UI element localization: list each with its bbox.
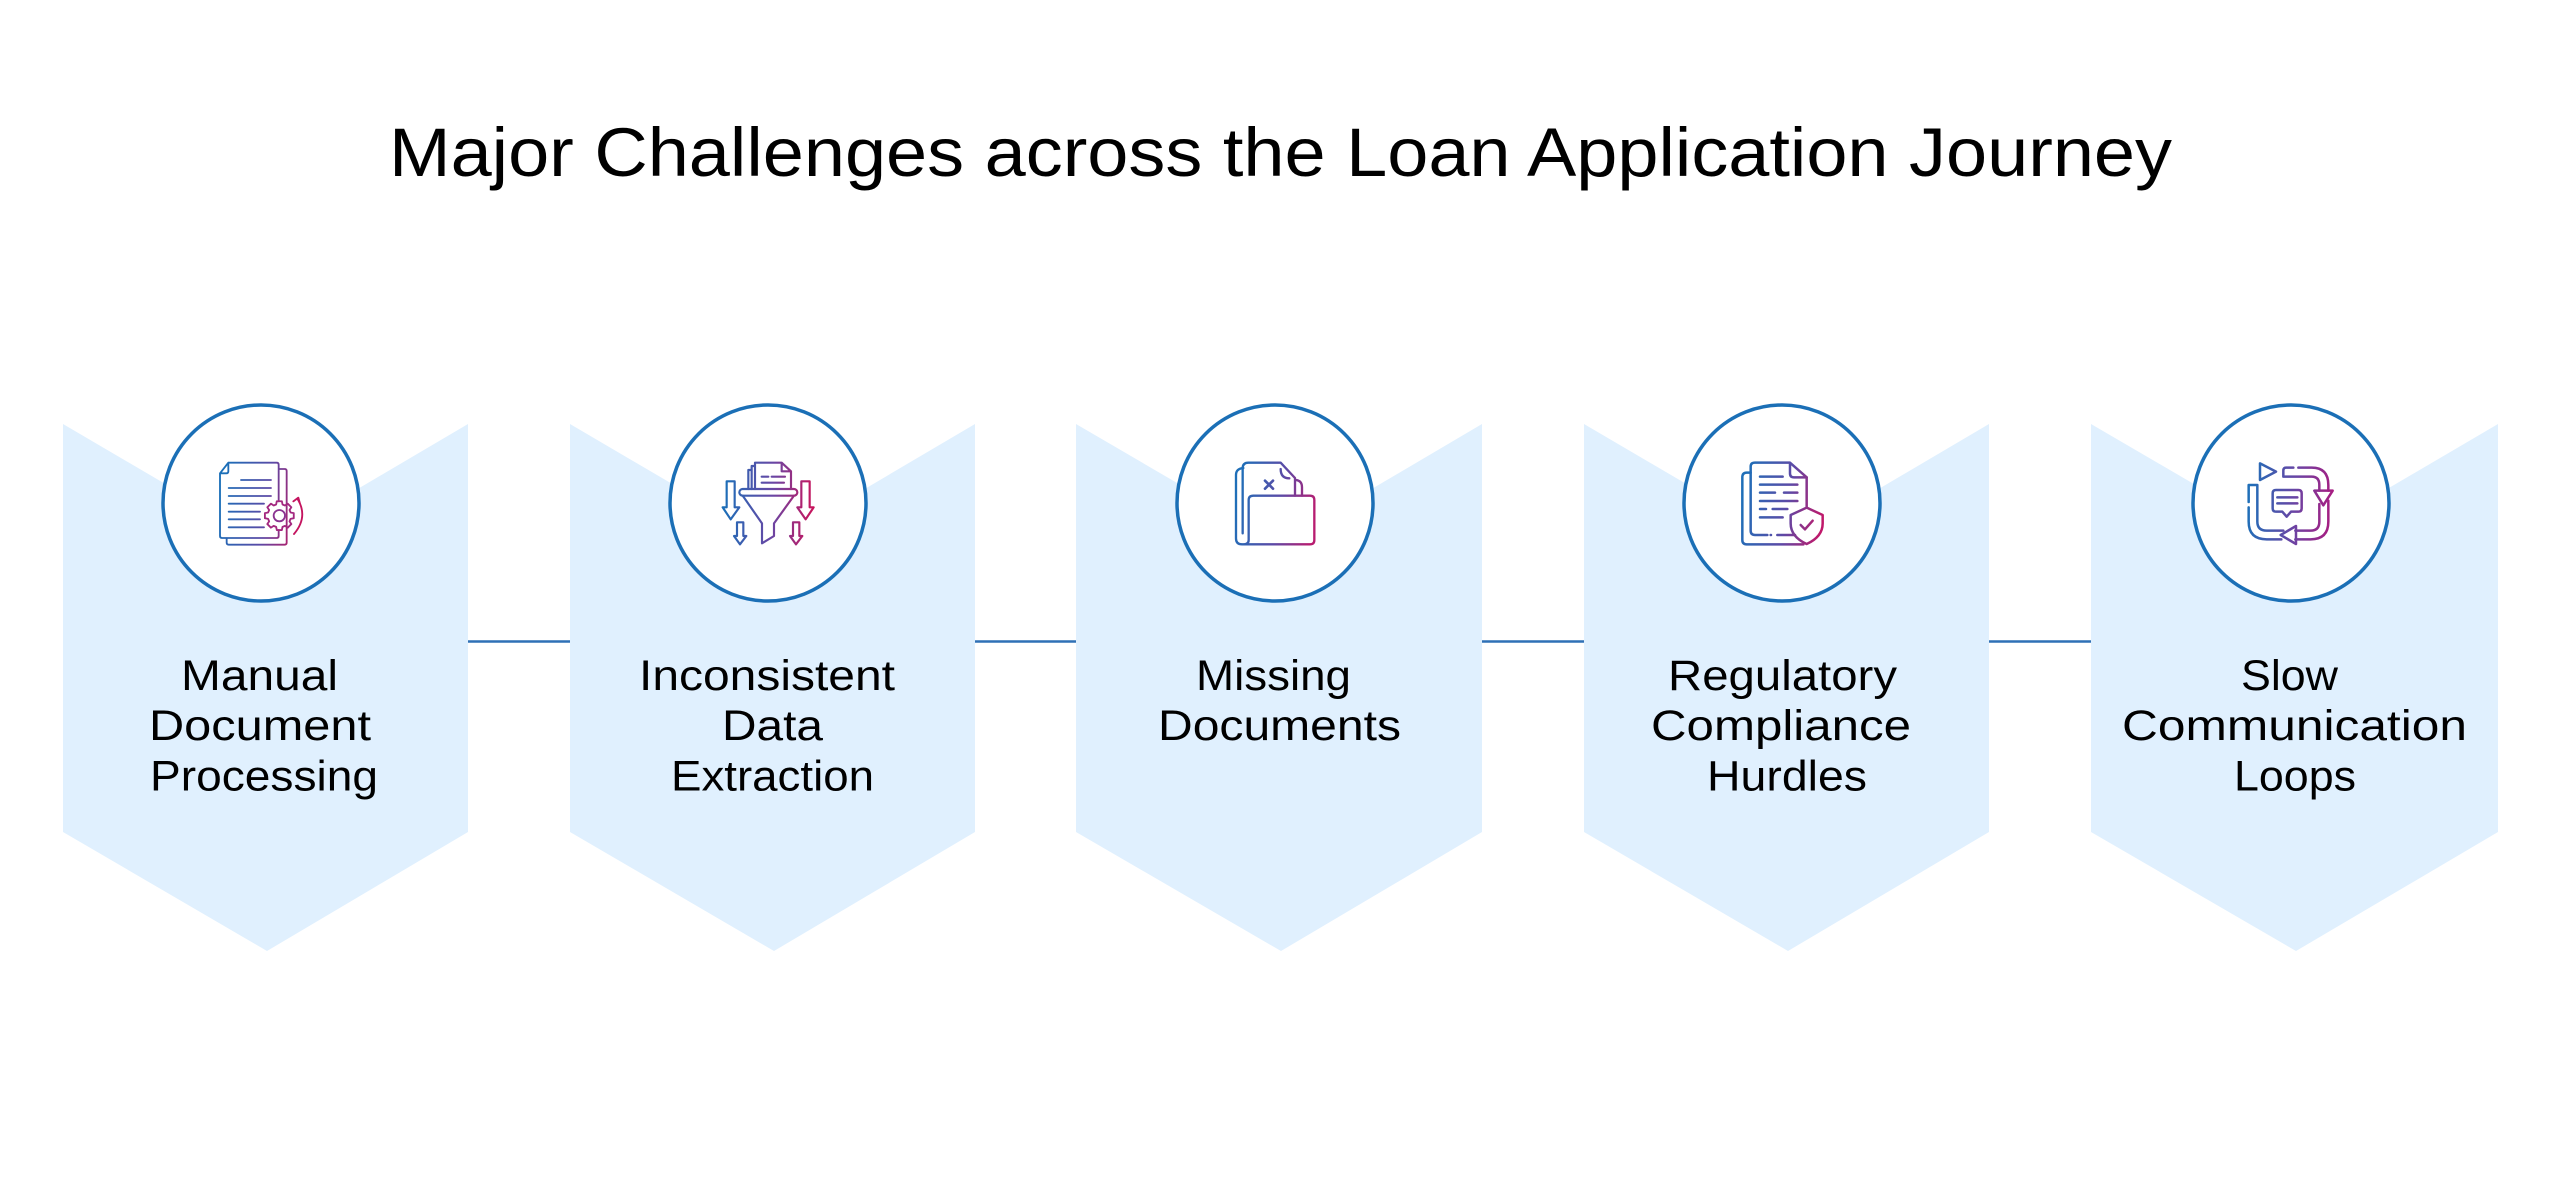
- label: Data: [722, 702, 823, 750]
- label: Missing: [1196, 652, 1351, 700]
- circle badge: [2193, 405, 2389, 601]
- chevron background: [2091, 424, 2498, 951]
- label: Document: [149, 702, 371, 750]
- label: Communication: [2122, 702, 2467, 750]
- icon: document with gear: [220, 463, 302, 545]
- label: Inconsistent: [639, 652, 895, 700]
- connector: step 3 to step 4: [1482, 640, 1584, 643]
- panel: regulatory compliance hurdles: [1584, 405, 1989, 951]
- panel: inconsistent data extraction: [570, 405, 975, 951]
- label: Slow: [2241, 652, 2339, 700]
- circle badge: [1177, 405, 1373, 601]
- circle badge: [1684, 405, 1880, 601]
- chevron background: [570, 424, 975, 951]
- icon: document with shield: [1742, 463, 1823, 544]
- label: [2122, 652, 2467, 800]
- label: Loops: [2234, 752, 2356, 800]
- chevron background: [63, 424, 468, 951]
- circle badge: [163, 405, 359, 601]
- icon: folder with missing document: [1236, 463, 1314, 544]
- label: Documents: [1158, 702, 1401, 750]
- label: [1651, 652, 1911, 800]
- chevron background: [1584, 424, 1989, 951]
- label: Regulatory: [1668, 652, 1898, 700]
- label: Hurdles: [1707, 752, 1867, 800]
- panel: missing documents: [1076, 405, 1482, 951]
- chevron background: [1076, 424, 1482, 951]
- label: [639, 652, 895, 800]
- label: [149, 652, 378, 800]
- label: Compliance: [1651, 702, 1911, 750]
- icon: funnel with arrows: [723, 463, 814, 544]
- circle badge: [670, 405, 866, 601]
- label: Manual: [181, 652, 338, 700]
- panel: slow communication loops: [2091, 405, 2498, 951]
- panel: manual document processing: [63, 405, 468, 951]
- connector: step 1 to step 2: [468, 640, 570, 643]
- label: [1158, 652, 1401, 750]
- label: Processing: [150, 752, 378, 800]
- label: Extraction: [671, 752, 874, 800]
- connector: step 2 to step 3: [975, 640, 1076, 643]
- title: Major Challenges across the Loan Application Journey: [389, 114, 2173, 191]
- icon: communication loop: [2249, 463, 2333, 544]
- connector: step 4 to step 5: [1989, 640, 2091, 643]
